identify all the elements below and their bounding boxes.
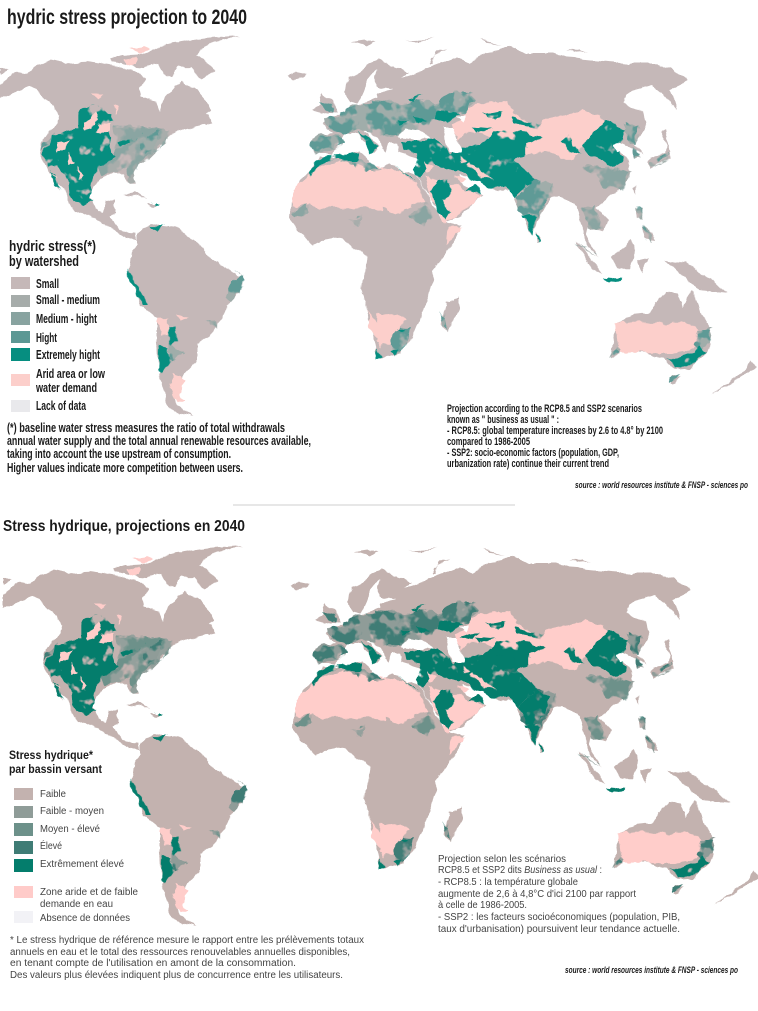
scenario note: French: taux d'urbanisation) poursuivent leur tendance actuelle. [438,923,680,935]
scenario note: French: - RCP8.5 : la température globale [438,876,578,888]
scenario note: - RCP8.5: global temperature increases by 2.6 to 4.8° by 2100 [447,425,663,437]
legend item: faible: Faible [40,789,66,800]
legend: stress hydrique par bassin versant [9,748,138,924]
title: hydric stress projection to 2040 [7,6,247,29]
legend item: extrêmement élevé: Extrêmement élevé [40,859,124,870]
legend item: zone aride [14,886,138,910]
scenario note: compared to 1986-2005 [447,436,530,448]
footnote: stress hydrique de référence: annuels en eau et le total des ressources renouvelables annuelles disponibles, [10,947,350,958]
scenario note: known as " business as usual " : [447,414,559,426]
scenario note: - SSP2: socio-economic factors (population, GDP, [447,447,619,459]
footnote: stress hydrique de référence [10,935,364,981]
legend heading: by watershed [9,253,79,270]
footnote: baseline water stress: (*) baseline water stress measures the ratio of total withdrawals [7,421,285,435]
scenario note: Projection according to the RCP8.5 and SSP2 scenarios [447,403,642,415]
legend item: faible [14,788,66,800]
legend item: extremely hight: Extremely hight [36,347,100,362]
map: world hydric stress projection, English [0,36,757,417]
scenario note: urbanization rate) continue their current trend [447,458,609,470]
legend item: small [11,276,59,291]
legend item: moyen - élevé: Moyen - élevé [40,824,100,835]
legend item: arid area [11,366,106,395]
legend heading [9,238,96,270]
footnote: baseline water stress: taking into account the use upstream of consumption. [7,447,231,461]
scenario note [447,403,663,470]
legend heading: Stress hydrique* [9,748,93,762]
legend heading: par bassin versant [9,762,102,776]
legend item: moyen - élevé [14,823,100,836]
legend item: absence de données [14,911,130,924]
legend item: extremely hight [11,347,100,362]
legend item: lack of data: Lack of data [36,398,87,413]
legend item: élevé: Élevé [40,839,62,852]
scenario note: French: - SSP2 : les facteurs socioéconomiques (population, PIB, [438,911,680,923]
footnote: stress hydrique de référence: en tenant compte de l'utilisation en amont de la consommation. [10,958,296,969]
title: French: Stress hydrique, projections en 2040 [3,518,245,535]
legend item: small - medium: Small - medium [36,292,100,307]
footnote: baseline water stress [7,421,311,475]
scenario note: French [438,853,680,935]
legend item: faible - moyen [14,806,104,818]
legend: hydric stress by watershed [9,238,106,413]
scenario note: French: augmente de 2,6 à 4,8°C d'ici 2100 par rapport [438,888,636,900]
legend item: zone aride: demande en eau [40,899,113,910]
legend item: small: Small [36,276,59,291]
legend item: hight: Hight [36,330,57,345]
legend item: lack of data [11,398,87,413]
legend item: extrêmement élevé [14,859,124,872]
legend heading [9,748,102,776]
legend item: faible - moyen: Faible - moyen [40,806,104,817]
legend item: absence de données: Absence de données [40,913,130,924]
legend item: élevé [14,839,62,854]
legend item: arid area: water demand [35,380,97,395]
scenario note: French: RCP8.5 et SSP2 dits Business as usual : [438,864,602,876]
legend item: hight [11,330,57,345]
map: world hydric stress projection, French [3,546,758,927]
footnote: stress hydrique de référence: Des valeurs plus élevées indiquent plus de concurrence entre les utilisateurs. [10,970,343,981]
footnote: baseline water stress: Higher values indicate more competition between users. [7,461,243,475]
legend item: medium - hight: Medium - hight [36,311,97,326]
legend heading: hydric stress(*) [9,238,96,255]
legend item: arid area: Arid area or low [36,366,106,381]
footnote: baseline water stress: annual water supply and the total annual renewable resources available, [7,434,311,448]
legend item: small - medium [11,292,100,307]
legend item: zone aride: Zone aride et de faible [40,887,138,898]
scenario note: French: à celle de 1986-2005. [438,899,527,911]
legend item: medium - hight [11,311,97,326]
footnote: stress hydrique de référence: * Le stress hydrique de référence mesure le rapport entre les prélèvements totaux [10,935,364,946]
scenario note: French: Projection selon les scénarios [438,853,566,865]
